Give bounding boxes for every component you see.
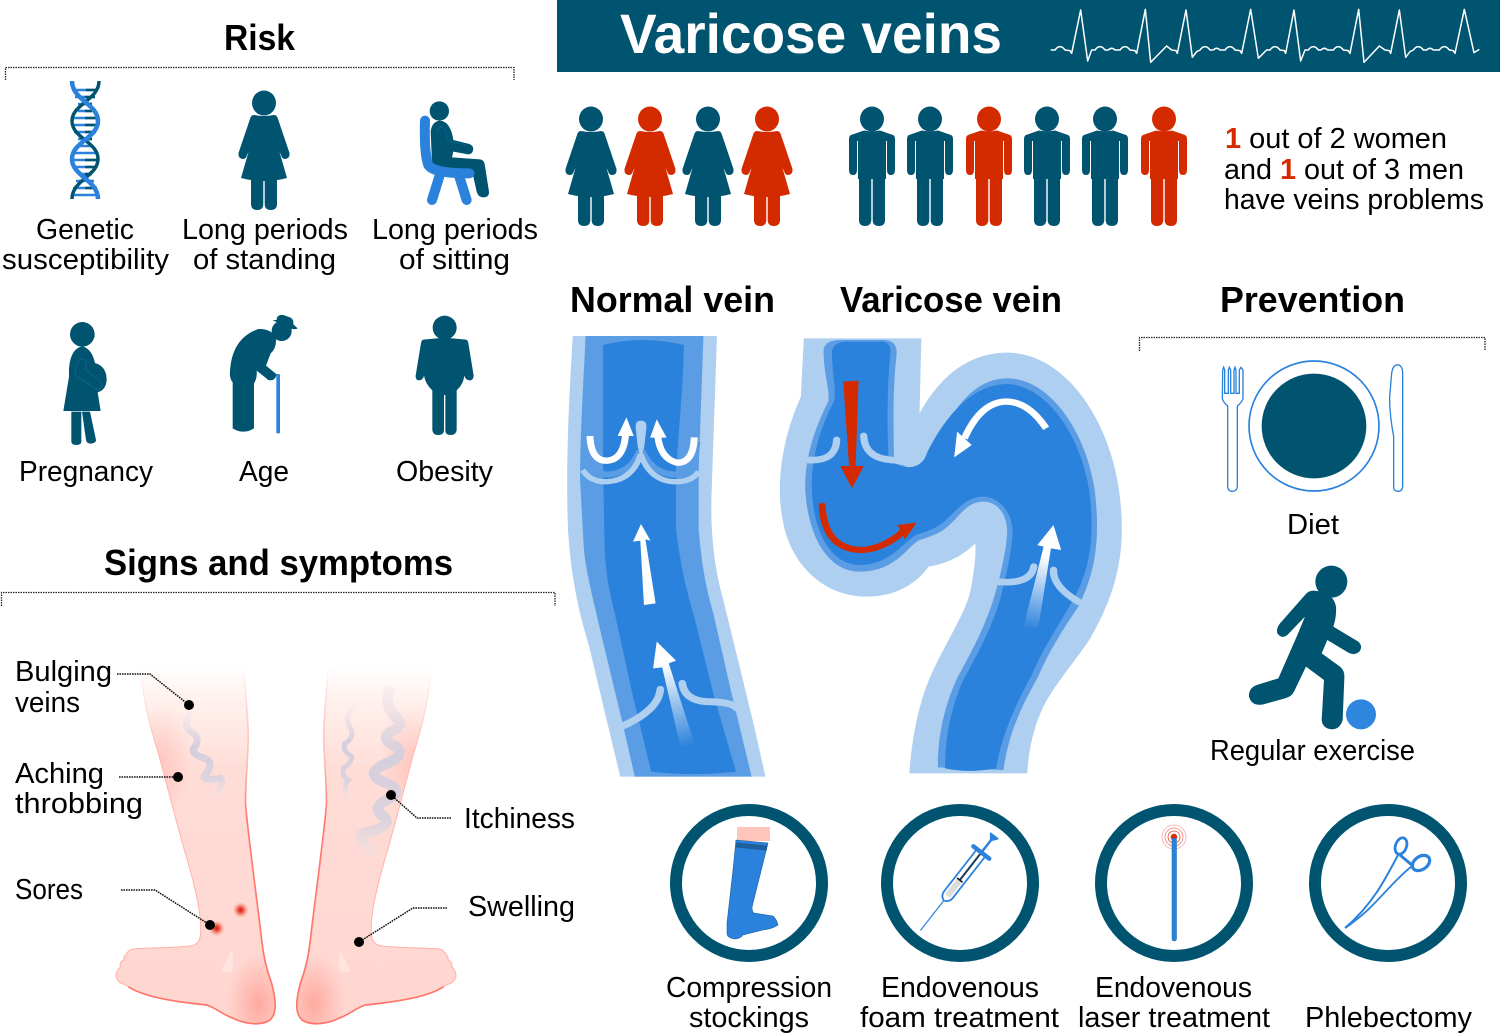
icon row: men (849, 106, 1187, 226)
callout: aching throbbing (15, 758, 183, 820)
treatment: endovenous laser (1078, 810, 1270, 1034)
callout: sores (15, 874, 215, 930)
treatment: endovenous foam: foam treatment (860, 1002, 1059, 1034)
callout: swelling (354, 891, 575, 947)
panel: treatments (666, 810, 1472, 1034)
callout: bulging veins: veins (15, 687, 80, 719)
panel: varicose vein (780, 279, 1122, 773)
label: pregnancy: Pregnancy (19, 456, 153, 488)
icon: obese person (416, 316, 474, 435)
icon: heartbeat trace (1051, 9, 1479, 62)
treatment: compression stockings: stockings (689, 1002, 809, 1034)
callout: swelling: Swelling (468, 891, 575, 923)
label: long periods of standing (182, 214, 348, 276)
icon: person kicking ball (1249, 566, 1376, 729)
callout: itchiness: Itchiness (464, 803, 575, 835)
title: Varicose veins (620, 2, 1002, 65)
label: long periods of standing: Long periods (182, 214, 348, 246)
label: long periods of sitting (372, 214, 538, 276)
label: genetic susceptibility: susceptibility (2, 244, 170, 276)
label: genetic susceptibility: Genetic (36, 214, 134, 246)
treatment: phlebectomy (1305, 810, 1472, 1034)
icon: DNA (71, 81, 99, 199)
callout: bulging veins: Bulging (15, 656, 112, 688)
panel: risk (2, 17, 538, 488)
label: regular exercise: Regular exercise (1210, 735, 1415, 767)
treatment: endovenous foam: Endovenous (881, 972, 1039, 1004)
treatment: compression stockings: Compression (666, 972, 832, 1004)
treatment: endovenous foam (860, 810, 1059, 1034)
heading: signs and symptoms: Signs and symptoms (104, 542, 453, 583)
diagram: normal vein (567, 336, 765, 777)
callout: aching throbbing: throbbing (15, 788, 143, 820)
label: genetic susceptibility (2, 214, 170, 276)
diagram: varicose vein (780, 338, 1122, 773)
panel: normal vein (567, 279, 775, 777)
treatment: phlebectomy: Phlebectomy (1305, 1002, 1472, 1034)
icon: elderly person with cane (230, 315, 298, 433)
callout: itchiness (386, 790, 575, 835)
icon: sitting person (425, 101, 489, 200)
header band (557, 0, 1500, 72)
illustration: left leg (116, 667, 290, 1034)
heading: varicose vein: Varicose vein (840, 279, 1062, 320)
callout: sores: Sores (15, 874, 83, 906)
heading: normal vein: Normal vein (570, 279, 775, 320)
text: prevalence statement: and 1 out of 3 men (1224, 154, 1464, 186)
text: prevalence statement: have veins problems (1224, 184, 1484, 216)
icon: standing woman (238, 90, 290, 210)
label: diet: Diet (1287, 509, 1339, 541)
panel: prevention (1140, 279, 1485, 767)
treatment: compression stockings (666, 810, 832, 1034)
label: age: Age (239, 456, 289, 488)
callout: aching throbbing: Aching (15, 758, 104, 790)
icon: plate fork and knife (1222, 361, 1403, 491)
label: obesity: Obesity (396, 456, 493, 488)
treatment: endovenous laser: laser treatment (1078, 1002, 1270, 1034)
label: long periods of sitting: of sitting (399, 244, 510, 276)
illustration: right leg (282, 667, 456, 1034)
icon row: women (565, 106, 793, 226)
text: prevalence statement: 1 out of 2 women (1225, 123, 1447, 155)
panel: prevalence (565, 106, 1484, 226)
text: prevalence statement (1224, 123, 1484, 216)
heading: prevention: Prevention (1220, 279, 1405, 320)
panel: signs and symptoms (2, 542, 575, 1034)
label: long periods of standing: of standing (193, 244, 336, 276)
heading: risk: Risk (224, 17, 296, 58)
icon: pregnant woman (63, 322, 107, 445)
treatment: endovenous laser: Endovenous (1095, 972, 1252, 1004)
callout: bulging veins (15, 656, 194, 719)
label: long periods of sitting: Long periods (372, 214, 538, 246)
